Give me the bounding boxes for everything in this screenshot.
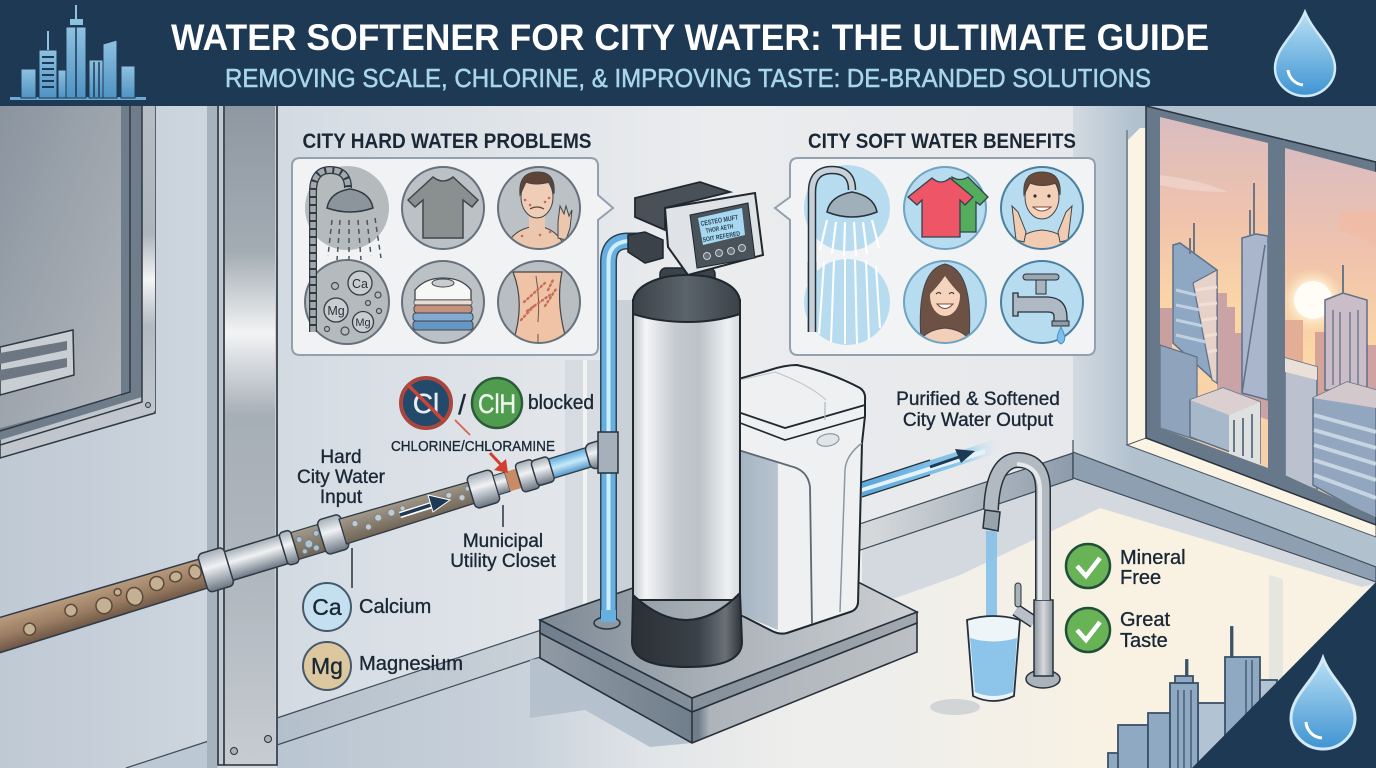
checklist: mineral free: Mineral — [1120, 547, 1186, 569]
steel sleeve — [221, 535, 289, 581]
control valve head: SOIT REFERED — [702, 230, 741, 244]
label: municipal utility closet: Municipal — [463, 531, 543, 552]
checklist: mineral free — [1066, 544, 1186, 589]
chlorine blocked badges: ClH — [478, 389, 516, 419]
water stream — [986, 531, 997, 631]
bubbly section — [289, 523, 330, 560]
red arrow to chlorine filter — [455, 420, 508, 473]
panel: city hard water problems — [292, 130, 613, 355]
blue pipe section — [549, 447, 595, 478]
platform — [530, 555, 917, 747]
icon: minerals Ca and Mg: Ca — [352, 277, 368, 291]
steel column — [207, 106, 278, 768]
display bezel — [690, 203, 755, 268]
rusty left pipe — [0, 556, 212, 654]
baseboard — [126, 440, 1376, 768]
heading: problems: CITY HARD WATER PROBLEMS — [302, 130, 592, 153]
label: purified output: Purified & Softened — [896, 389, 1060, 410]
left pane — [1160, 117, 1268, 468]
icon: minerals Ca and Mg: Mg — [355, 317, 371, 329]
control valve head: CESTEO MUFT — [700, 214, 739, 228]
control valve head: THOR AETH — [705, 223, 734, 235]
legend: calcium: Calcium — [359, 596, 431, 618]
icon: water drop header — [1275, 12, 1335, 96]
header band — [0, 0, 1376, 106]
subtitle: REMOVING SCALE, CHLORINE, & IMPROVING TASTE: DE-BRANDED SOLUTIONS — [225, 65, 1151, 93]
icon: minerals Ca and Mg — [305, 260, 389, 344]
legend: calcium: Ca — [312, 594, 342, 620]
checklist: great taste — [1066, 608, 1170, 652]
output pipe — [862, 438, 1000, 497]
corner skyline — [1108, 627, 1277, 768]
elbow to tee — [584, 439, 613, 470]
icon: man with irritated skin — [498, 167, 580, 250]
icon: smiling woman — [904, 261, 986, 350]
blue inlet pipe — [594, 232, 663, 629]
legend: magnesium — [303, 642, 463, 690]
right wall — [1073, 106, 1376, 567]
label: hard city water input: City Water — [297, 467, 386, 488]
icon: scaly shower head — [305, 166, 389, 332]
corner triangle — [1192, 582, 1376, 768]
label: hard city water input: Hard — [320, 447, 362, 468]
panel: city soft water benefits — [775, 130, 1095, 355]
scaled pipe section — [339, 479, 481, 544]
legend: calcium — [303, 583, 431, 631]
kitchen faucet — [983, 460, 1060, 688]
right pane — [1280, 140, 1376, 525]
display screen — [698, 208, 745, 245]
chlorine blocked badges: / — [458, 389, 466, 420]
flange 4 — [515, 459, 540, 493]
title: WATER SOFTENER FOR CITY WATER: THE ULTIMATE GUIDE — [171, 16, 1209, 58]
chlorine blocked badges — [391, 378, 594, 455]
floor — [126, 479, 1376, 768]
legend: magnesium: Magnesium — [359, 653, 463, 675]
icon: bright shirts — [904, 167, 988, 249]
window — [1127, 106, 1376, 537]
checklist: mineral free: Free — [1120, 567, 1161, 589]
icon: skin rash on back — [498, 261, 580, 345]
electrical panel on left wall — [0, 106, 155, 458]
icon: grey shirt — [402, 167, 484, 249]
heading: benefits: CITY SOFT WATER BENEFITS — [808, 130, 1076, 153]
label: hard city water input: Input — [320, 487, 363, 508]
label: purified output: City Water Output — [903, 410, 1054, 431]
icon: minerals Ca and Mg: Mg — [327, 304, 345, 318]
control valve head — [635, 182, 763, 275]
arrow: flow direction — [400, 495, 450, 515]
brine tank — [735, 365, 865, 634]
softener tank — [632, 268, 742, 667]
icon: water drop corner — [1291, 658, 1355, 749]
legend: magnesium: Mg — [311, 653, 343, 679]
label: municipal utility closet: Utility Closet — [450, 551, 557, 572]
flange 3 — [466, 469, 501, 509]
water glass — [930, 616, 1020, 715]
icon: clean shower head — [804, 165, 890, 332]
chlorine blocked badges: Cl — [413, 388, 439, 419]
icon: faded laundry stack — [402, 261, 484, 343]
wall recess behind inlet pipe — [565, 300, 634, 660]
flange 1 — [197, 547, 235, 593]
icon: water streams — [804, 258, 890, 345]
icon: skyline header — [10, 5, 146, 100]
leader lines — [352, 505, 503, 588]
icon: faucet — [1001, 261, 1083, 344]
checklist: great taste: Taste — [1120, 630, 1168, 652]
icon: happy man — [1001, 167, 1083, 252]
checklist: great taste: Great — [1120, 609, 1170, 631]
hard water pipe — [0, 432, 615, 657]
flange 2 — [278, 530, 300, 566]
callout box: problems — [292, 158, 613, 355]
arrow: output flow — [930, 456, 962, 467]
chlorine blocked badges: CHLORINE/CHLORAMINE — [391, 438, 555, 455]
callout box: benefits — [775, 158, 1095, 355]
chlorine blocked badges: blocked — [528, 392, 594, 414]
